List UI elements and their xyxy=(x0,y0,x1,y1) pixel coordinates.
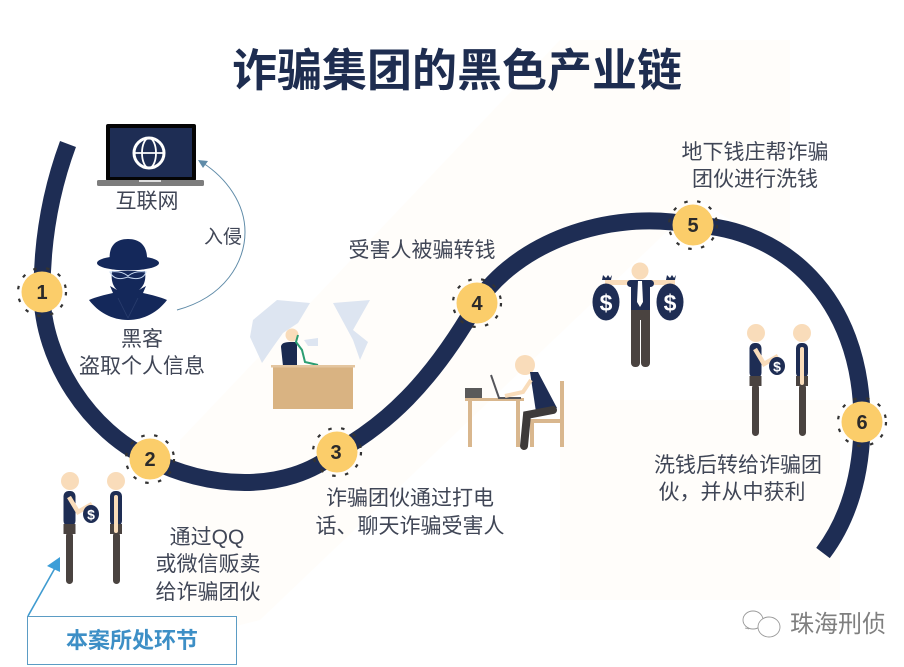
step 2 marker xyxy=(126,435,174,483)
step 1 marker: 1 xyxy=(36,282,48,304)
figure: man holding money bags xyxy=(592,262,684,367)
winding path xyxy=(42,144,862,553)
text: transfer after laundering: 伙，并从中获利 xyxy=(658,481,806,504)
label: internet: 互联网 xyxy=(116,190,178,213)
figure: handing over money, step 6 xyxy=(747,324,811,436)
text: scammers call and chat xyxy=(316,487,504,538)
title: 诈骗集团的黑色产业链 xyxy=(232,45,682,96)
text: sold via QQ or WeChat xyxy=(156,526,260,604)
figure: scammer on phone before world map xyxy=(250,300,370,409)
background watermark xyxy=(180,40,840,640)
step 4 marker: 4 xyxy=(471,293,483,315)
label: hacker: 黑客 xyxy=(121,328,163,351)
text: transfer after laundering: 洗钱后转给诈骗团 xyxy=(654,454,822,477)
watermark: WeChat account: 珠海刑侦 xyxy=(790,611,886,638)
watermark: WeChat account xyxy=(743,611,886,638)
step 6 marker xyxy=(838,398,886,446)
step 6 marker: 6 xyxy=(856,412,868,434)
step 2 marker: 2 xyxy=(144,449,156,471)
figure: handing over money, step 2: $ xyxy=(87,506,95,522)
step 3 marker xyxy=(313,428,361,476)
text: underground bank launders money: 团伙进行洗钱 xyxy=(692,168,818,191)
step 4 marker xyxy=(453,279,501,327)
text: scammers call and chat: 诈骗团伙通过打电 xyxy=(326,487,494,510)
arrow: intrusion xyxy=(177,160,245,310)
figure: man holding money bags: $ xyxy=(600,290,613,316)
callout: current stage xyxy=(28,616,236,664)
figure: handing over money, step 2 xyxy=(61,472,125,584)
figure: victim at laptop xyxy=(465,355,564,447)
label: intrude: 入侵 xyxy=(204,226,242,248)
step 1 marker xyxy=(18,268,66,316)
label: steal personal info: 盗取个人信息 xyxy=(79,355,205,378)
icon: laptop with globe xyxy=(97,124,204,186)
step 3 marker: 3 xyxy=(330,442,342,464)
text: sold via QQ or WeChat: 给诈骗团伙 xyxy=(156,581,260,604)
callout: current stage: 本案所处环节 xyxy=(66,628,198,653)
figure: man holding money bags: $ xyxy=(664,290,677,316)
label: victim transfers money: 受害人被骗转钱 xyxy=(348,239,496,262)
text: sold via QQ or WeChat: 或微信贩卖 xyxy=(156,553,260,576)
text: sold via QQ or WeChat: 通过QQ xyxy=(170,526,244,549)
figure: handing over money, step 6: $ xyxy=(773,358,781,374)
step 5 marker xyxy=(669,201,717,249)
text: underground bank launders money xyxy=(682,141,828,191)
icon: hacker xyxy=(89,239,167,320)
text: transfer after laundering xyxy=(654,454,822,504)
text: underground bank launders money: 地下钱庄帮诈骗 xyxy=(682,141,828,164)
text: scammers call and chat: 话、聊天诈骗受害人 xyxy=(316,515,504,538)
arrow: case stage pointer xyxy=(28,557,60,616)
step 5 marker: 5 xyxy=(687,215,699,237)
